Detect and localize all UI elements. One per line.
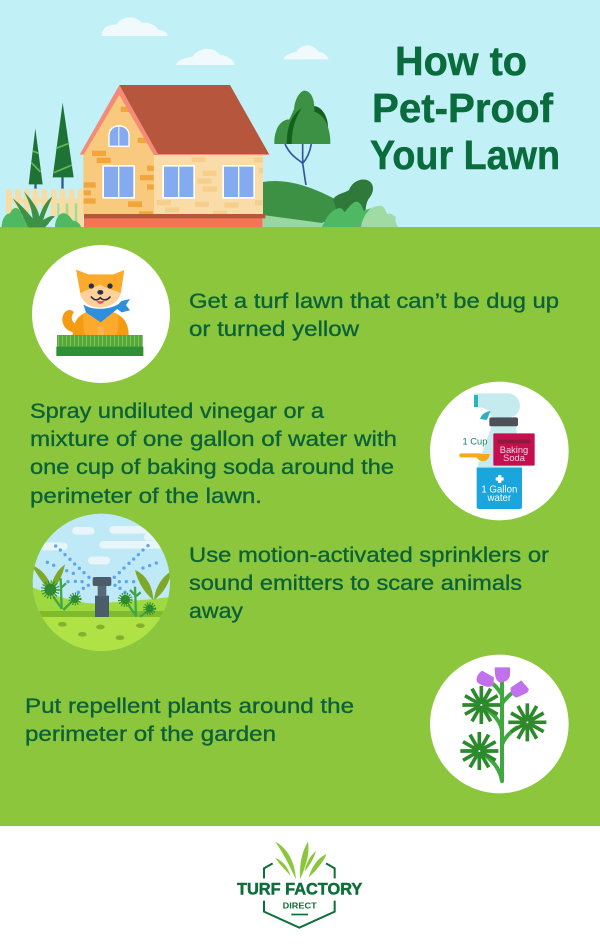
title: Pet-Proof: [372, 85, 553, 131]
cone trees: [29, 103, 74, 190]
water container: 1 Gallon: [481, 485, 517, 496]
icon: repellent plant: [430, 655, 569, 793]
text: turf lawn tip: or turned yellow: [189, 317, 360, 341]
text: sprinklers tip: Use motion-activated sprinklers or: [189, 543, 549, 567]
water container: water: [487, 493, 512, 504]
title: Your Lawn: [370, 132, 560, 178]
round tree: [274, 91, 330, 185]
icon: dog on turf: [32, 245, 170, 383]
attic window: [108, 125, 130, 147]
dog tail: [62, 310, 77, 332]
clouds: [40, 526, 171, 564]
ground floor windows: [102, 165, 255, 199]
text: sprinklers tip: away: [189, 599, 243, 623]
garden shrubs: [2, 192, 81, 227]
text: sprinklers tip: [189, 543, 549, 623]
stems: [485, 682, 517, 781]
clouds: [102, 17, 329, 65]
turf: [56, 335, 143, 356]
sky background: [0, 0, 600, 228]
logo wordmark: TURF FACTORY: [237, 880, 362, 899]
dog face: [89, 283, 113, 304]
baking soda box: [493, 433, 535, 466]
text: vinegar and baking soda tip: [30, 399, 397, 508]
logo: Turf Factory Direct: [237, 842, 362, 928]
water container: [477, 468, 522, 509]
icon: sprinkler scene: [30, 512, 173, 655]
text: vinegar and baking soda tip: Spray undiluted vinegar or a: [30, 399, 324, 423]
text: turf lawn tip: Get a turf lawn that can’t be dug up: [189, 289, 559, 313]
house base: [84, 214, 265, 227]
water spray: [46, 544, 158, 594]
logo hexagon frame: [264, 863, 335, 928]
green content panel: [0, 227, 600, 826]
dog head: [76, 270, 124, 307]
illustration: hills and bushes right of house: [263, 179, 398, 227]
picket fence: [6, 188, 83, 227]
text: vinegar and baking soda tip: one cup of baking soda around the: [30, 455, 394, 479]
illustration: house and garden scene: [2, 17, 330, 227]
bandana: [83, 299, 130, 322]
text: vinegar and baking soda tip: perimeter of the lawn.: [30, 484, 262, 508]
logo: Turf Factory Direct: DIRECT: [283, 901, 317, 911]
text: turf lawn tip: [189, 289, 559, 341]
text: sprinklers tip: sound emitters to scare animals: [189, 571, 522, 595]
text: repellent plants tip: perimeter of the garden: [25, 722, 276, 746]
measuring cup: 1 Cup: [463, 437, 487, 447]
hills and lawn: [30, 587, 173, 618]
baking soda box: Soda: [503, 453, 526, 463]
title: [370, 38, 560, 178]
icon: spray bottle with baking soda and water: [430, 382, 569, 520]
bottle: [474, 393, 522, 468]
white footer band: [0, 826, 600, 950]
text: repellent plants tip: [25, 694, 354, 746]
logo grass blades: [275, 842, 327, 879]
roof: [80, 85, 269, 155]
spiky leaves: [460, 686, 546, 770]
text: repellent plants tip: Put repellent plants around the: [25, 694, 354, 718]
baking soda box: Baking: [500, 445, 528, 455]
text: vinegar and baking soda tip: mixture of one gallon of water with: [30, 427, 397, 451]
flower buds: [477, 667, 529, 698]
house walls: [83, 95, 263, 214]
title: How to: [395, 38, 527, 84]
dog body: [73, 310, 129, 335]
sprinkler head: [93, 577, 111, 617]
plants: [32, 564, 172, 617]
